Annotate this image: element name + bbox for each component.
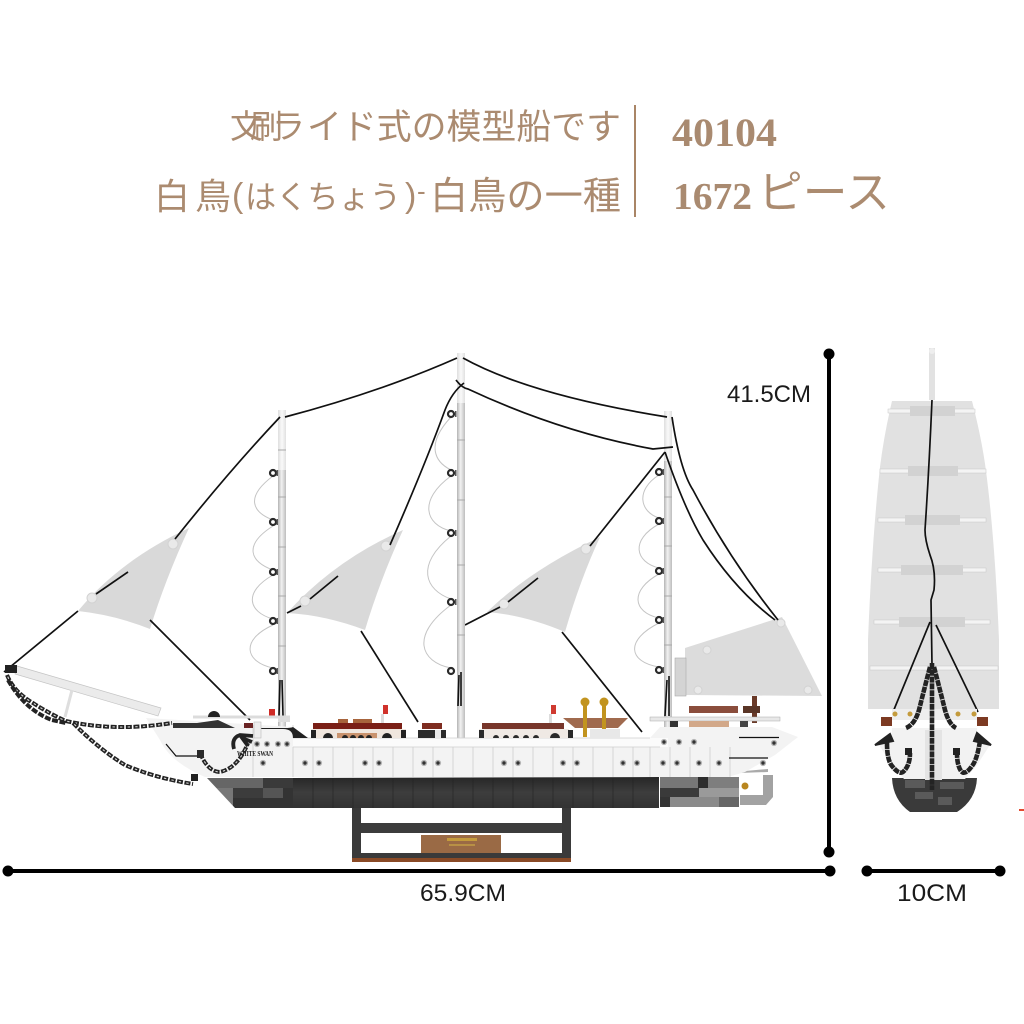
deck house 1 — [311, 719, 406, 738]
bow deck details — [193, 711, 290, 738]
stand — [352, 806, 571, 862]
heading line 2: 白鳥の一種 — [430, 176, 621, 218]
hull rivets — [255, 740, 776, 765]
side view: ship model — [4, 353, 822, 862]
ratlines — [250, 417, 659, 668]
bow deck wedge — [173, 720, 235, 728]
plaque — [421, 835, 501, 853]
dimension: width — [862, 866, 1006, 907]
heading line 1: ラ — [272, 108, 305, 145]
sail: jib 2 — [287, 530, 403, 630]
rudder — [738, 769, 773, 805]
ship name: WHITE SWAN — [237, 750, 273, 758]
deck house 3 — [479, 723, 573, 738]
heading line 1: 文 — [230, 108, 263, 145]
bow chains — [7, 675, 253, 784]
piece count — [673, 167, 890, 218]
sail: jib 1 — [78, 528, 189, 629]
dimension: height: 41.5CM — [727, 381, 811, 408]
heading line 1: 刷 — [250, 108, 283, 145]
rigging ropes — [4, 358, 778, 732]
yards and rollers — [870, 406, 998, 670]
sail: fore spanker at stern — [675, 617, 822, 696]
heading line 2: ( — [232, 177, 244, 215]
deck edge curve — [255, 727, 308, 738]
red lamps — [269, 705, 556, 723]
sail: jib 3 — [465, 537, 600, 632]
heading line 2: ) — [405, 177, 416, 215]
masts — [278, 353, 672, 738]
dimension: height — [727, 348, 834, 858]
piece count: 1672 — [673, 176, 752, 218]
front sails — [868, 401, 999, 709]
aft deck house — [650, 696, 780, 727]
gold bollards — [580, 698, 608, 737]
dimension: length: 65.9CM — [420, 880, 506, 907]
front mast and stays — [893, 348, 978, 712]
heading line 2 — [154, 176, 621, 218]
upper hull — [146, 718, 798, 777]
lower hull — [200, 769, 773, 808]
front chains — [875, 663, 991, 790]
dimension: width: 10CM — [897, 880, 967, 907]
heading line 2: はくちょう — [245, 179, 401, 215]
title: product description — [154, 105, 890, 218]
ship's boat — [563, 718, 628, 728]
item number: 40104 — [672, 110, 777, 155]
front hull — [879, 709, 990, 812]
anchor — [233, 735, 253, 749]
dimension: length — [2, 866, 836, 907]
divider — [634, 105, 636, 217]
bowsprit — [5, 665, 161, 717]
front view: ship model — [868, 348, 999, 812]
piece count: ピース — [758, 167, 890, 218]
heading line 2: 白 — [154, 176, 190, 217]
deck house 2 — [418, 723, 446, 738]
deck houses and fittings — [193, 696, 780, 738]
heading line 2: 鳥 — [195, 176, 231, 217]
mast rings — [270, 411, 664, 674]
mark: red speck at right edge — [1019, 809, 1024, 811]
heading line 2: - — [417, 176, 426, 206]
heading line 1: イド式の模型船です — [307, 108, 621, 147]
hull black trim lines — [166, 738, 779, 758]
